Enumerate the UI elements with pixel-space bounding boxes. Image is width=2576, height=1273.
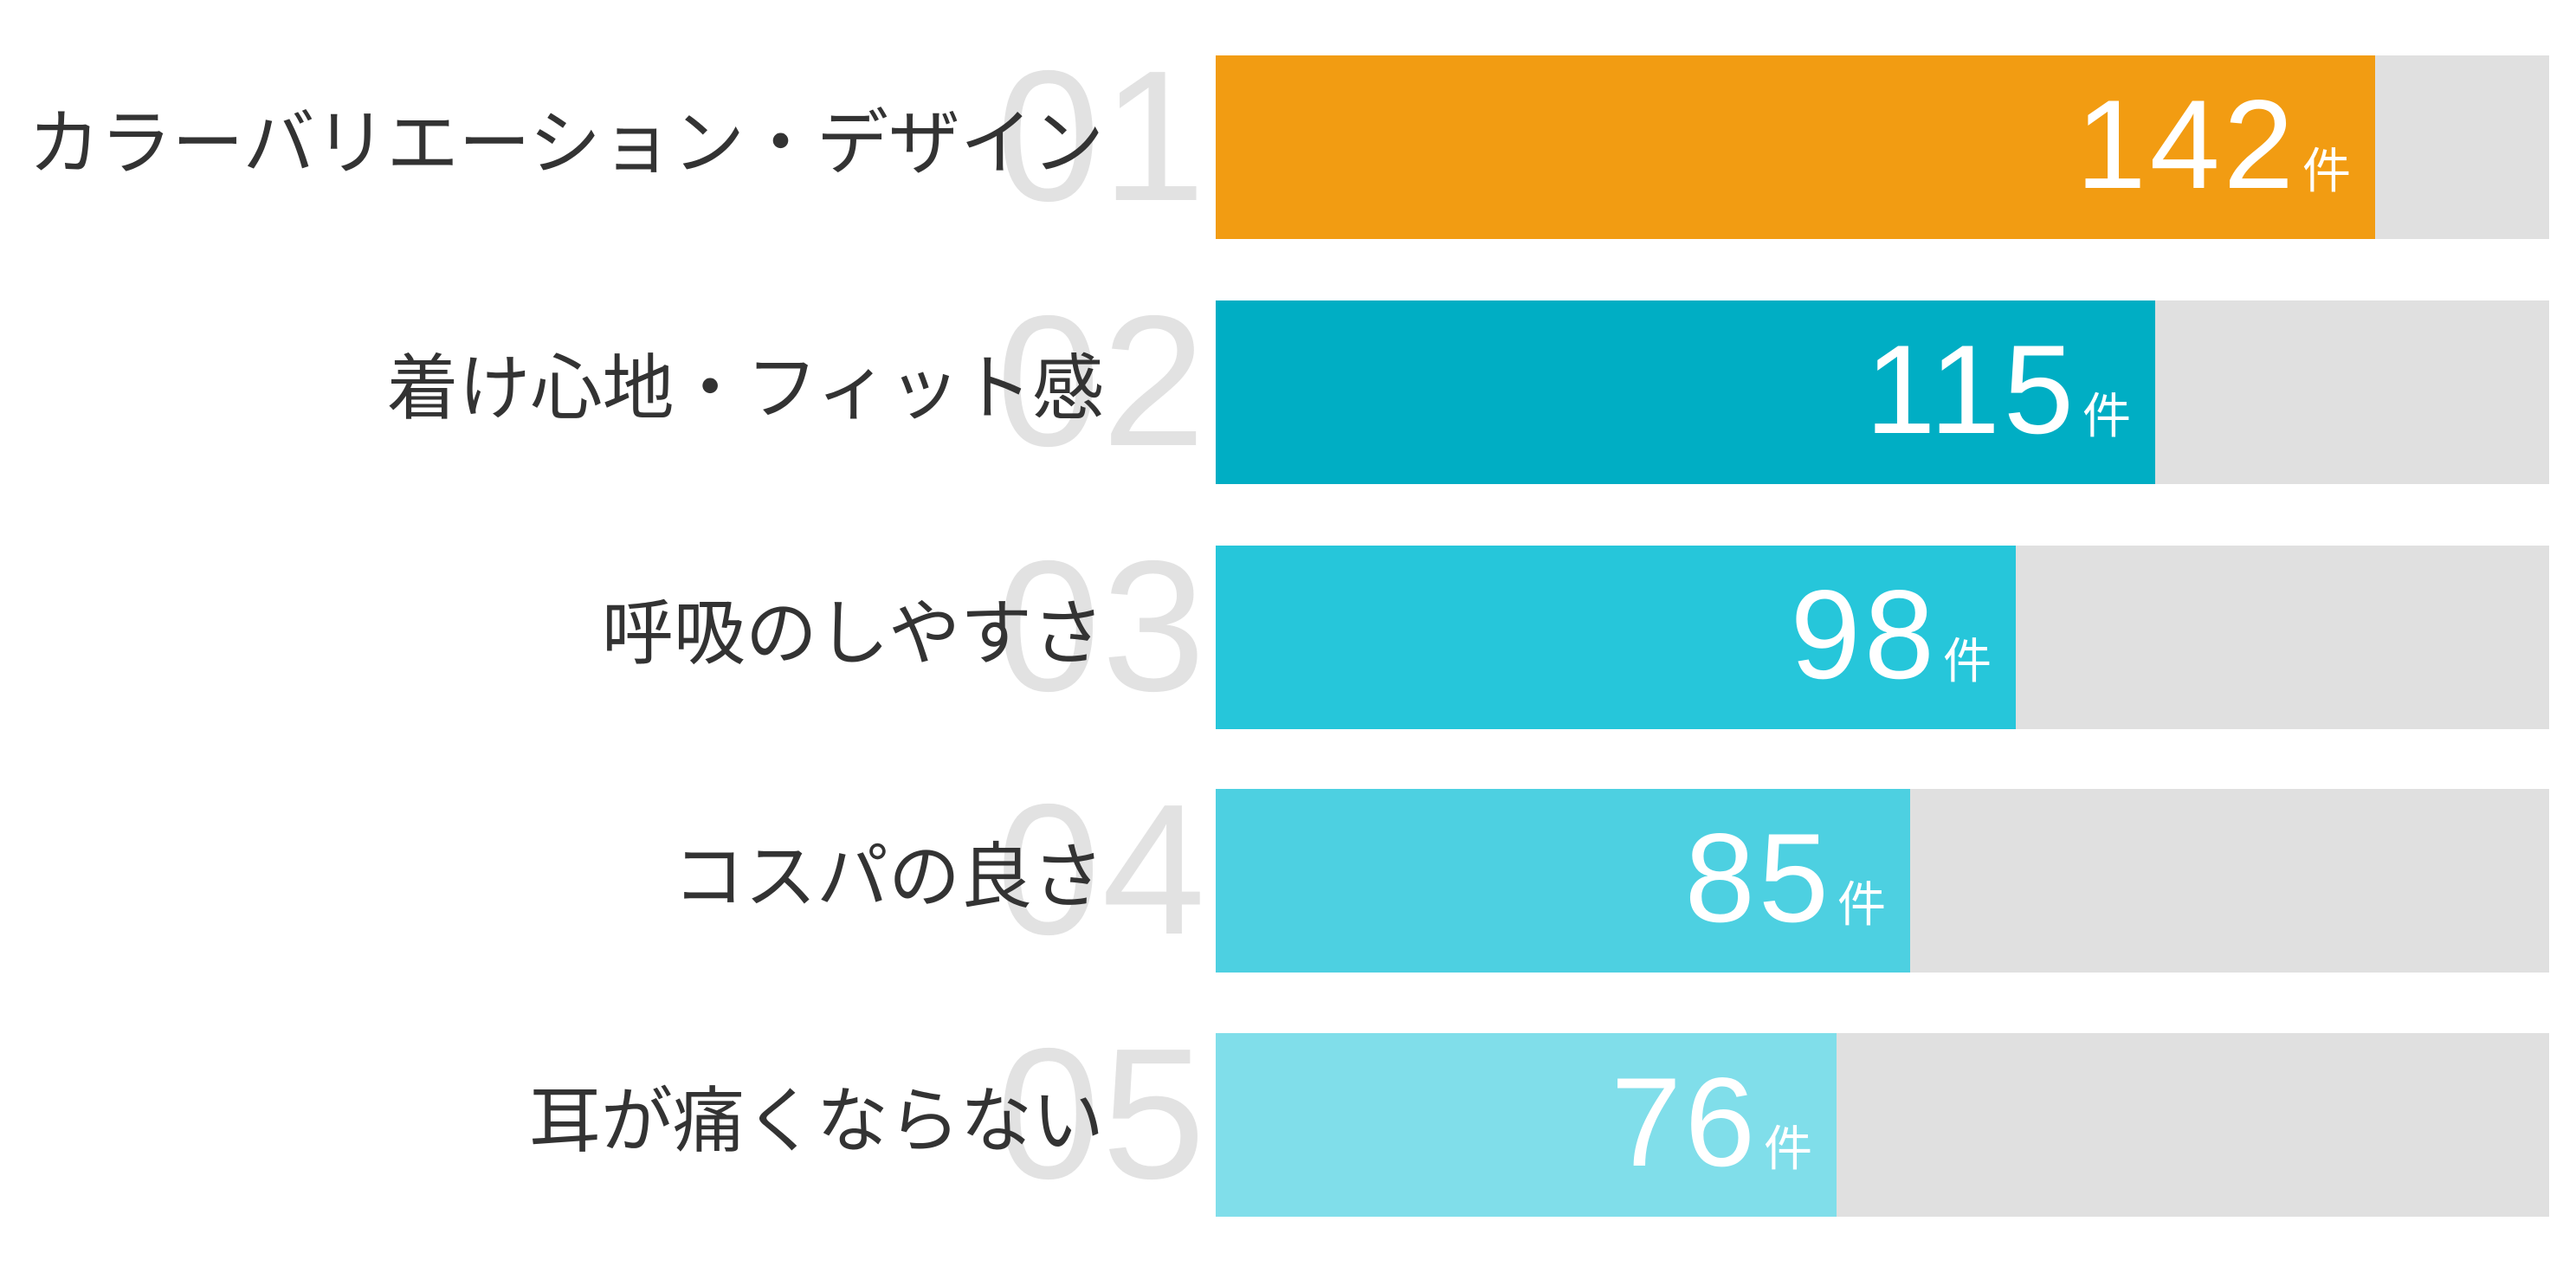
label: breathing: 呼吸のしやすさ <box>602 593 1104 674</box>
rank number 05: 05 <box>997 1009 1207 1218</box>
bar 2 <box>1216 300 2549 484</box>
rank number 01: 01 <box>997 31 1207 240</box>
row 5 <box>529 1009 2549 1218</box>
bar 3 <box>1216 546 2549 729</box>
value 142: 142件 <box>2076 74 2351 215</box>
bar 5 <box>1216 1033 2549 1217</box>
value 115: 115件 <box>1865 319 2131 460</box>
value 98: 98件 <box>1791 564 1992 705</box>
row 3 <box>602 521 2549 730</box>
rank number 03: 03 <box>997 521 1207 730</box>
row 1 <box>28 31 2549 240</box>
rank number 02: 02 <box>997 276 1207 485</box>
value 76: 76件 <box>1611 1051 1812 1192</box>
label: fit: 着け心地・フィット感 <box>387 348 1104 429</box>
label: cost: コスパの良さ <box>673 837 1104 917</box>
label: ears: 耳が痛くならない <box>529 1081 1104 1161</box>
row 4 <box>673 765 2549 973</box>
value 85: 85件 <box>1685 807 1886 948</box>
label: color design: カラーバリエーション・デザイン <box>28 103 1104 184</box>
bar 1 <box>1216 55 2549 239</box>
rank number 04: 04 <box>997 765 1207 973</box>
row 2 <box>387 276 2549 485</box>
bar 4 <box>1216 789 2549 973</box>
